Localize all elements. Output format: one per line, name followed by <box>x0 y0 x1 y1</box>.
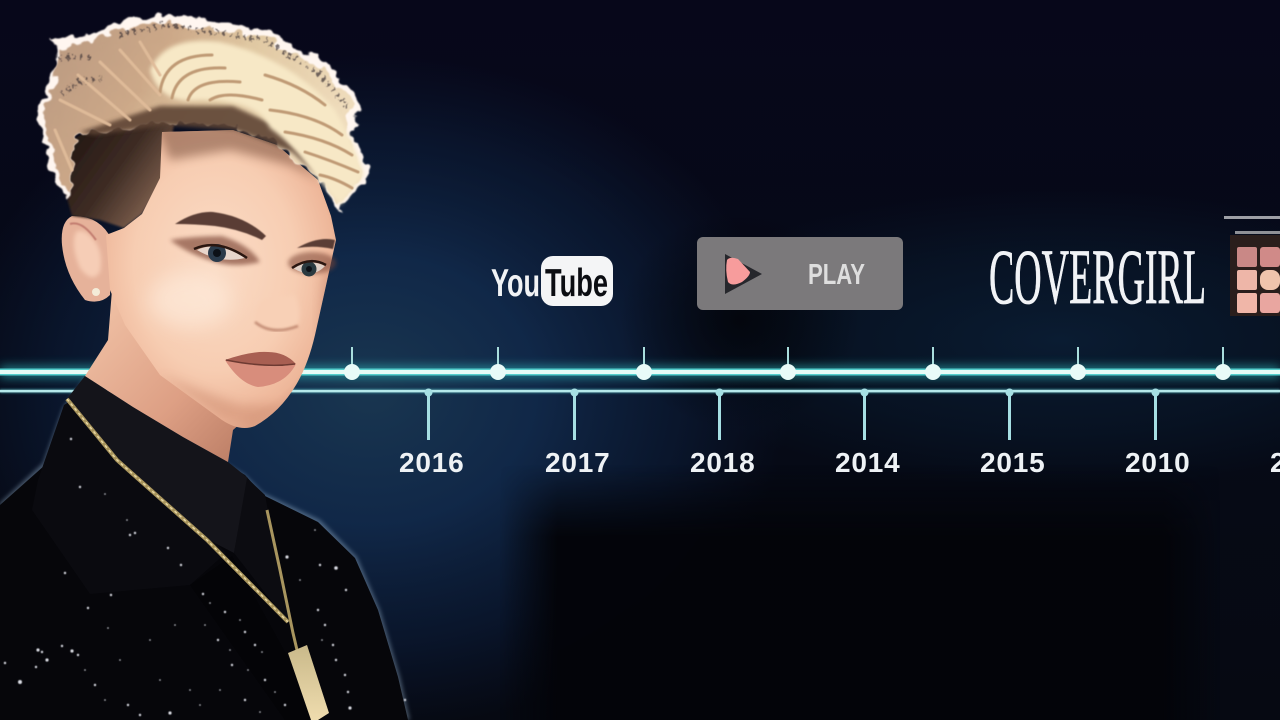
logo: YouTube <box>491 256 613 306</box>
portrait <box>0 14 410 720</box>
timeline <box>0 347 1280 478</box>
dark speckles <box>60 25 350 110</box>
play button <box>697 237 903 310</box>
neck <box>85 290 250 462</box>
year labels: 2017 <box>545 447 610 478</box>
hair <box>37 14 370 212</box>
lips <box>225 352 296 387</box>
lower markers <box>424 388 1160 440</box>
nose <box>255 295 299 331</box>
cream wave <box>150 41 364 205</box>
secondary line <box>0 388 1280 394</box>
undercut <box>62 118 175 228</box>
hair mass <box>43 22 362 204</box>
year labels: 2010 <box>1125 447 1190 478</box>
jacket sequins <box>4 438 406 716</box>
icon: play <box>725 254 762 294</box>
eyebrows <box>175 212 335 249</box>
upper markers <box>344 347 1231 380</box>
pendant <box>288 645 329 720</box>
play button: PLAY <box>808 259 865 291</box>
logo: YouTube: You <box>491 262 540 305</box>
hair rim <box>37 14 370 212</box>
logo: YouTube: Tube <box>545 262 608 305</box>
tan strands <box>55 42 160 170</box>
necklace <box>67 399 329 720</box>
year labels: 2018 <box>690 447 756 478</box>
year labels: 2016 <box>399 447 464 478</box>
shirt collar <box>66 376 290 625</box>
jacket <box>0 378 410 720</box>
year labels: 2015 <box>980 447 1046 478</box>
face shading <box>148 125 340 426</box>
face <box>106 130 336 428</box>
eyes <box>170 236 336 276</box>
ear <box>62 216 112 302</box>
hair shadow <box>80 106 322 180</box>
main glowing line <box>0 366 1280 378</box>
year labels: 2014 <box>835 447 900 478</box>
makeup palette <box>1224 216 1280 316</box>
year labels <box>399 447 1280 478</box>
